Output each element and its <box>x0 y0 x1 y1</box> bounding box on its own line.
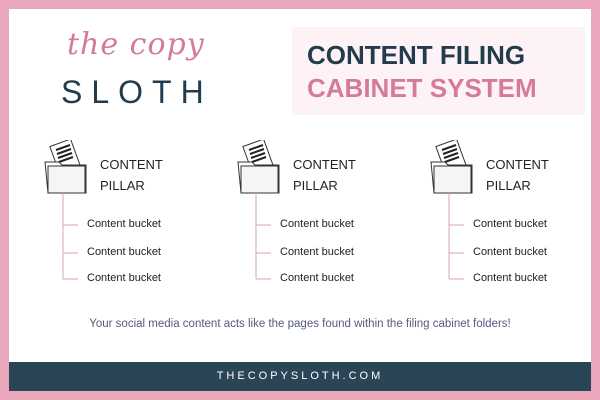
logo script: the copy <box>67 27 205 62</box>
pillar 1: Content bucket <box>87 218 161 230</box>
pillar 2 <box>237 140 356 284</box>
pillar 3: Content bucket <box>473 218 547 230</box>
pillar 1: Content bucket <box>87 246 161 258</box>
footer bar <box>9 362 591 391</box>
pillar 2: Content bucket <box>280 272 354 284</box>
pillar 1: CONTENT <box>100 157 163 172</box>
pillar 3: Content bucket <box>473 272 547 284</box>
pillar 3: Content bucket <box>473 246 547 258</box>
pillar 2: PILLAR <box>293 178 338 193</box>
pillar 2: Content bucket <box>280 218 354 230</box>
icon: folder <box>237 140 280 194</box>
title box <box>292 27 585 115</box>
logo <box>61 27 213 110</box>
pillars <box>44 140 549 284</box>
footer bar: THECOPYSLOTH.COM <box>217 370 383 382</box>
footer caption: Your social media content acts like the pages found within the filing cabinet folders! <box>89 318 511 330</box>
tree lines <box>62 193 78 280</box>
title <box>307 40 537 103</box>
pillar 1: Content bucket <box>87 272 161 284</box>
pillar 1 <box>44 140 163 284</box>
title: CABINET SYSTEM <box>307 73 537 103</box>
pillar 2: CONTENT <box>293 157 356 172</box>
pillar 3: CONTENT <box>486 157 549 172</box>
title: CONTENT FILING <box>307 40 525 70</box>
icon: folder <box>430 140 472 194</box>
pillar 2: Content bucket <box>280 246 354 258</box>
pillar 3: PILLAR <box>486 178 531 193</box>
logo SLOTH: SLOTH <box>61 74 213 110</box>
icon: folder <box>44 140 86 194</box>
pillar 1: PILLAR <box>100 178 145 193</box>
pillar 3 <box>430 140 549 284</box>
